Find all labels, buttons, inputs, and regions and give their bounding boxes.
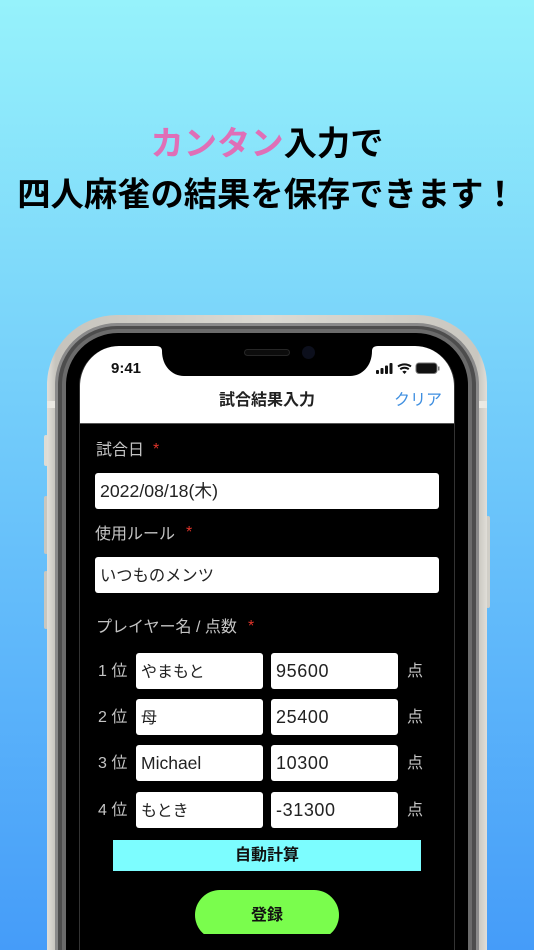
phone frame — [47, 315, 487, 950]
input: rule — [95, 557, 439, 593]
antenna bands — [47, 401, 487, 408]
row 3: 3 位 — [98, 755, 127, 772]
row 2: 母 — [141, 710, 157, 727]
row 3: 点 — [407, 755, 423, 772]
label: players: プレイヤー名 / 点数 — [96, 619, 237, 636]
notch — [156, 346, 378, 376]
camera — [302, 346, 315, 359]
row 1: 1 位 — [98, 663, 127, 680]
screen — [79, 346, 455, 950]
header bar — [80, 346, 456, 424]
status time: 9:41 — [111, 360, 141, 377]
register button: 登録 — [251, 907, 283, 924]
row 1: やまもと — [141, 664, 205, 681]
input: date — [95, 473, 439, 509]
required mark: * — [248, 618, 254, 635]
header title: 試合結果入力 — [219, 392, 315, 409]
auto calculate button: 自動計算 — [235, 847, 299, 864]
status icons — [376, 362, 440, 374]
row 1 — [98, 653, 423, 689]
auto calculate button — [113, 840, 421, 871]
row 4: -31300 — [276, 800, 336, 820]
title — [17, 126, 517, 214]
title: カンタン入力で — [150, 126, 384, 163]
row 3 — [98, 745, 423, 781]
label: rule: 使用ルール — [95, 526, 175, 543]
row 2 — [98, 699, 423, 735]
required mark: * — [153, 441, 159, 458]
label: date: 試合日 — [96, 442, 144, 459]
row 2: 25400 — [276, 707, 329, 727]
row 3: Michael — [141, 753, 201, 773]
row 4 — [98, 792, 423, 828]
row 4: もとき — [141, 803, 189, 820]
title: 四人麻雀の結果を保存できます！ — [17, 177, 517, 214]
side buttons — [44, 435, 48, 466]
row 1: 95600 — [276, 661, 329, 681]
input: date: 2022/08/18(木) — [100, 481, 218, 501]
required mark: * — [186, 524, 192, 541]
clear button: クリア — [394, 392, 442, 409]
row 2: 点 — [407, 709, 423, 726]
row 3: 10300 — [276, 753, 329, 773]
row 4: 点 — [407, 802, 423, 819]
row 1: 点 — [407, 663, 423, 680]
input: rule: いつものメンツ — [100, 567, 214, 585]
row 4: 4 位 — [98, 802, 127, 819]
row 2: 2 位 — [98, 709, 127, 726]
speaker — [244, 349, 290, 356]
